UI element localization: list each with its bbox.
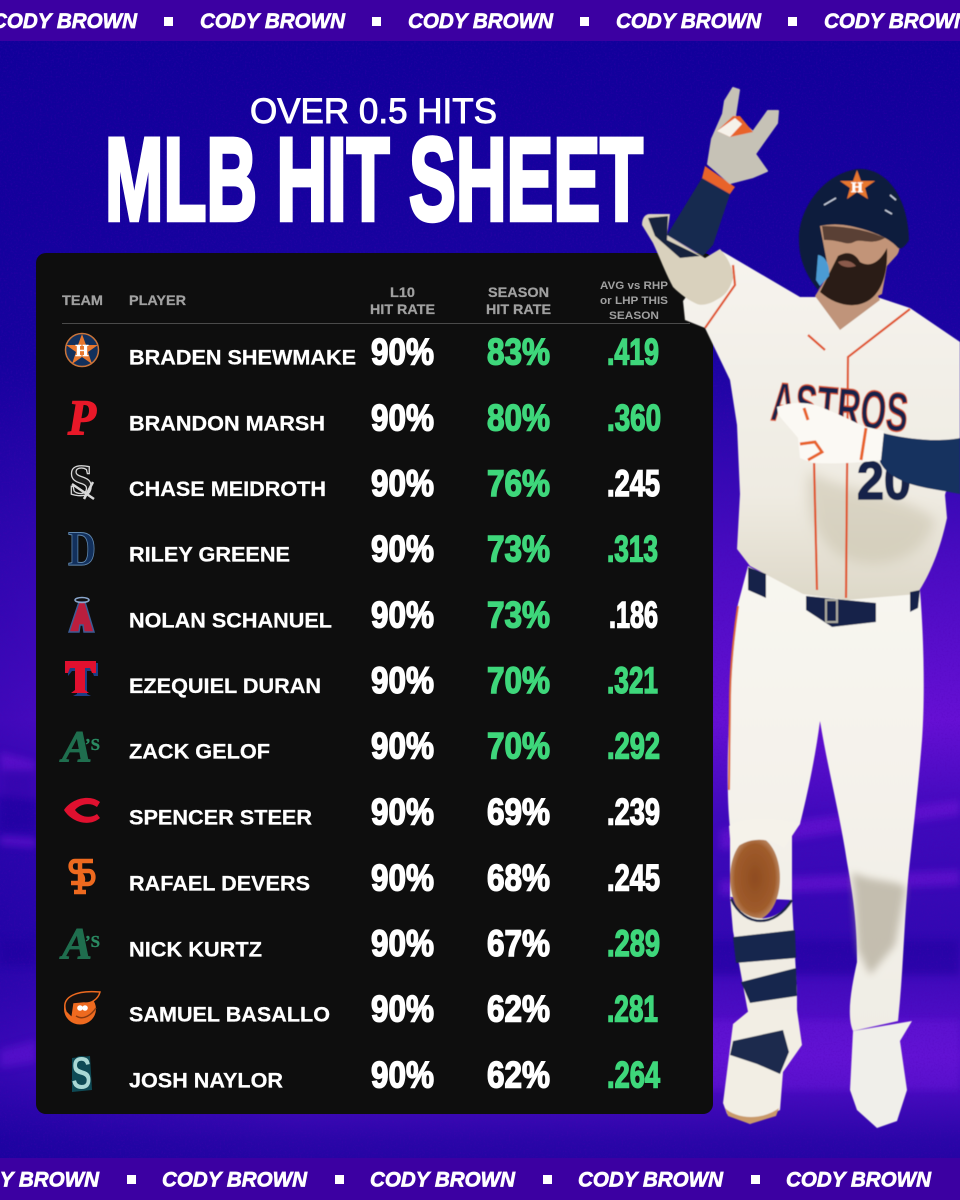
icon: Astros logo bbox=[66, 334, 98, 366]
row: Josh Naylor bbox=[71, 1047, 660, 1099]
row: Braden Shewmake: .419 bbox=[607, 332, 659, 372]
row: Chase Meidroth bbox=[69, 456, 660, 505]
orange pant stripe bbox=[729, 606, 738, 790]
pant hem over knee bbox=[729, 819, 800, 852]
row: Nick Kurtz: 67% bbox=[487, 923, 550, 964]
icon: Athletics logo: ’S bbox=[85, 932, 100, 951]
icon: Athletics logo: A bbox=[59, 919, 92, 968]
shin guard strap upper bbox=[733, 930, 796, 963]
row: Spencer Steer: 69% bbox=[487, 792, 550, 832]
left shin guard bbox=[730, 897, 797, 1021]
bottom ticker band: CODY BROWN bbox=[786, 1168, 932, 1192]
row: Samuel Basallo bbox=[64, 988, 658, 1030]
row: Rafael Devers: 90% bbox=[371, 858, 434, 898]
row: Josh Naylor: .264 bbox=[607, 1054, 660, 1096]
neck bbox=[815, 280, 880, 330]
jersey piping bbox=[705, 265, 910, 598]
elbow wrap bbox=[642, 214, 733, 305]
icon: Orioles logo bbox=[64, 992, 100, 1024]
face bbox=[820, 224, 899, 308]
table header: TEAM bbox=[62, 292, 103, 308]
chest glove bbox=[777, 403, 884, 463]
icon: Reds logo bbox=[64, 798, 100, 823]
row: Samuel Basallo: SAMUEL BASALLO bbox=[129, 1004, 330, 1026]
eye shadow bbox=[822, 226, 885, 243]
row: Braden Shewmake: 90% bbox=[371, 332, 434, 372]
row: Ezequiel Duran bbox=[65, 660, 658, 701]
row: Ezequiel Duran: EZEQUIEL DURAN bbox=[129, 675, 321, 698]
row: Braden Shewmake bbox=[66, 332, 659, 372]
row: Chase Meidroth: 76% bbox=[487, 463, 550, 504]
pants shadow bbox=[852, 872, 906, 975]
icon: White Sox logo: S bbox=[69, 456, 93, 505]
table header: HIT RATE bbox=[486, 301, 551, 317]
belt center bbox=[806, 596, 876, 627]
shin guard top trim bbox=[731, 899, 792, 921]
row: Riley Greene: 90% bbox=[371, 528, 434, 570]
row: Riley Greene: RILEY GREENE bbox=[129, 544, 290, 566]
row: Braden Shewmake: 83% bbox=[487, 332, 550, 372]
row: Nick Kurtz: NICK KURTZ bbox=[129, 938, 262, 962]
row: Rafael Devers bbox=[71, 858, 660, 898]
top ticker band bbox=[0, 0, 960, 41]
row: Brandon Marsh: 80% bbox=[487, 398, 550, 438]
row: Ezequiel Duran: .321 bbox=[607, 660, 658, 701]
elbow wrap inner bbox=[648, 216, 700, 258]
table header: or LHP THIS bbox=[600, 295, 668, 307]
row: Josh Naylor: 62% bbox=[487, 1054, 550, 1096]
row: Zack Gelof: 70% bbox=[487, 726, 550, 766]
row: Nolan Schanuel: NOLAN SCHANUEL bbox=[129, 610, 332, 632]
row: Ezequiel Duran: 70% bbox=[487, 660, 550, 701]
right arm sleeve bbox=[880, 433, 960, 494]
helmet H: H bbox=[851, 180, 863, 196]
row: Brandon Marsh: BRANDON MARSH bbox=[129, 412, 325, 436]
row: Nolan Schanuel bbox=[69, 594, 658, 636]
knee dirt bbox=[730, 836, 780, 920]
row: Rafael Devers: RAFAEL DEVERS bbox=[129, 872, 310, 896]
row: Ezequiel Duran: 90% bbox=[371, 660, 434, 701]
row: Nolan Schanuel: .186 bbox=[609, 594, 658, 636]
row: Spencer Steer: 90% bbox=[371, 792, 434, 832]
row: Brandon Marsh: .360 bbox=[607, 398, 661, 438]
row: Riley Greene: 73% bbox=[487, 528, 550, 570]
table header: HIT RATE bbox=[370, 301, 435, 317]
table header: AVG vs RHP bbox=[600, 280, 668, 292]
row: Chase Meidroth: CHASE MEIDROTH bbox=[129, 478, 326, 501]
row: Riley Greene bbox=[68, 520, 658, 576]
bottom ticker band: CODY BROWN bbox=[162, 1168, 308, 1192]
raised glove bbox=[708, 88, 778, 183]
row: Nick Kurtz: .289 bbox=[607, 923, 660, 964]
row: Zack Gelof: .292 bbox=[607, 726, 660, 766]
table header: SEASON bbox=[609, 310, 659, 322]
wristband bbox=[702, 166, 735, 194]
jersey number: 20 bbox=[857, 451, 911, 511]
belt buckle bbox=[826, 600, 837, 622]
chest glove orange trim bbox=[800, 408, 866, 460]
table header: PLAYER bbox=[129, 292, 186, 308]
top ticker band: CODY BROWN bbox=[408, 10, 554, 33]
row: Nick Kurtz bbox=[59, 919, 660, 968]
panel: hit table bbox=[36, 253, 713, 1114]
icon: Mariners logo: S bbox=[71, 1047, 92, 1099]
icon: Mariners logo bbox=[71, 1047, 92, 1099]
bottom ticker band: CODY BROWN bbox=[578, 1168, 724, 1192]
table header: L10 bbox=[390, 284, 415, 300]
pants bbox=[728, 566, 924, 1031]
row: Brandon Marsh: 90% bbox=[371, 398, 434, 438]
player figure: Astros hitter celebrating bbox=[642, 88, 960, 1128]
helmet glare bbox=[824, 195, 896, 214]
row: Nolan Schanuel: 90% bbox=[371, 594, 434, 636]
jersey dirt shading bbox=[807, 470, 935, 564]
table header: SEASON bbox=[488, 284, 549, 300]
row: Josh Naylor: 90% bbox=[371, 1054, 434, 1096]
row: Brandon Marsh bbox=[67, 389, 661, 445]
upper arm sleeve bbox=[667, 178, 730, 256]
belt right bbox=[910, 590, 920, 612]
icon: Tigers logo: D bbox=[68, 520, 96, 576]
row: Chase Meidroth: .245 bbox=[607, 463, 660, 504]
row: Spencer Steer: SPENCER STEER bbox=[129, 806, 312, 830]
jersey torso bbox=[683, 250, 960, 600]
left shoe bbox=[723, 1010, 802, 1124]
shoe strap bbox=[730, 1030, 789, 1074]
belt left bbox=[748, 567, 766, 598]
row: Braden Shewmake: BRADEN SHEWMAKE bbox=[129, 346, 356, 370]
row: Samuel Basallo: .281 bbox=[607, 988, 658, 1030]
helmet bbox=[799, 169, 909, 290]
helmet star bbox=[840, 170, 875, 199]
icon: Athletics logo: A bbox=[59, 722, 92, 771]
row: Samuel Basallo: 90% bbox=[371, 988, 434, 1030]
row: Chase Meidroth: 90% bbox=[371, 463, 434, 504]
icon: Phillies logo: P bbox=[67, 389, 96, 445]
row: Josh Naylor: JOSH NAYLOR bbox=[129, 1070, 283, 1092]
row: Rafael Devers: 68% bbox=[487, 858, 550, 898]
shoe sole dirt bbox=[725, 1108, 779, 1124]
top ticker band: CODY BROWN bbox=[200, 10, 346, 33]
bottom ticker band: CODY BROWN bbox=[370, 1168, 516, 1192]
icon: Athletics logo: ’S bbox=[85, 735, 100, 754]
lips bbox=[838, 261, 856, 267]
row: Nolan Schanuel: 73% bbox=[487, 594, 550, 636]
row: Spencer Steer: .239 bbox=[607, 792, 660, 832]
row: Riley Greene: .313 bbox=[607, 528, 658, 570]
mouthguard bbox=[816, 255, 829, 286]
icon: Rangers logo bbox=[65, 661, 98, 696]
icon: Angels logo bbox=[69, 598, 94, 632]
glove tape white bbox=[717, 118, 742, 137]
beard bbox=[820, 248, 887, 305]
row: Rafael Devers: .245 bbox=[607, 858, 660, 898]
row: Samuel Basallo: 62% bbox=[487, 988, 550, 1030]
row: Spencer Steer bbox=[64, 792, 660, 832]
table header bbox=[62, 280, 690, 324]
icon: Astros logo: H bbox=[75, 341, 89, 360]
shin guard strap lower bbox=[741, 968, 797, 1003]
row: Zack Gelof bbox=[59, 722, 660, 771]
row: Nick Kurtz: 90% bbox=[371, 923, 434, 964]
top ticker band: CODY BROWN bbox=[616, 10, 762, 33]
row: Zack Gelof: ZACK GELOF bbox=[129, 740, 270, 764]
right shoe bbox=[850, 1021, 912, 1128]
glove finger tape bbox=[717, 116, 753, 137]
bottom ticker band bbox=[0, 1158, 960, 1200]
subtitle: OVER 0.5 HITS bbox=[250, 92, 497, 131]
row: Zack Gelof: 90% bbox=[371, 726, 434, 766]
icon: Giants logo bbox=[71, 861, 93, 892]
